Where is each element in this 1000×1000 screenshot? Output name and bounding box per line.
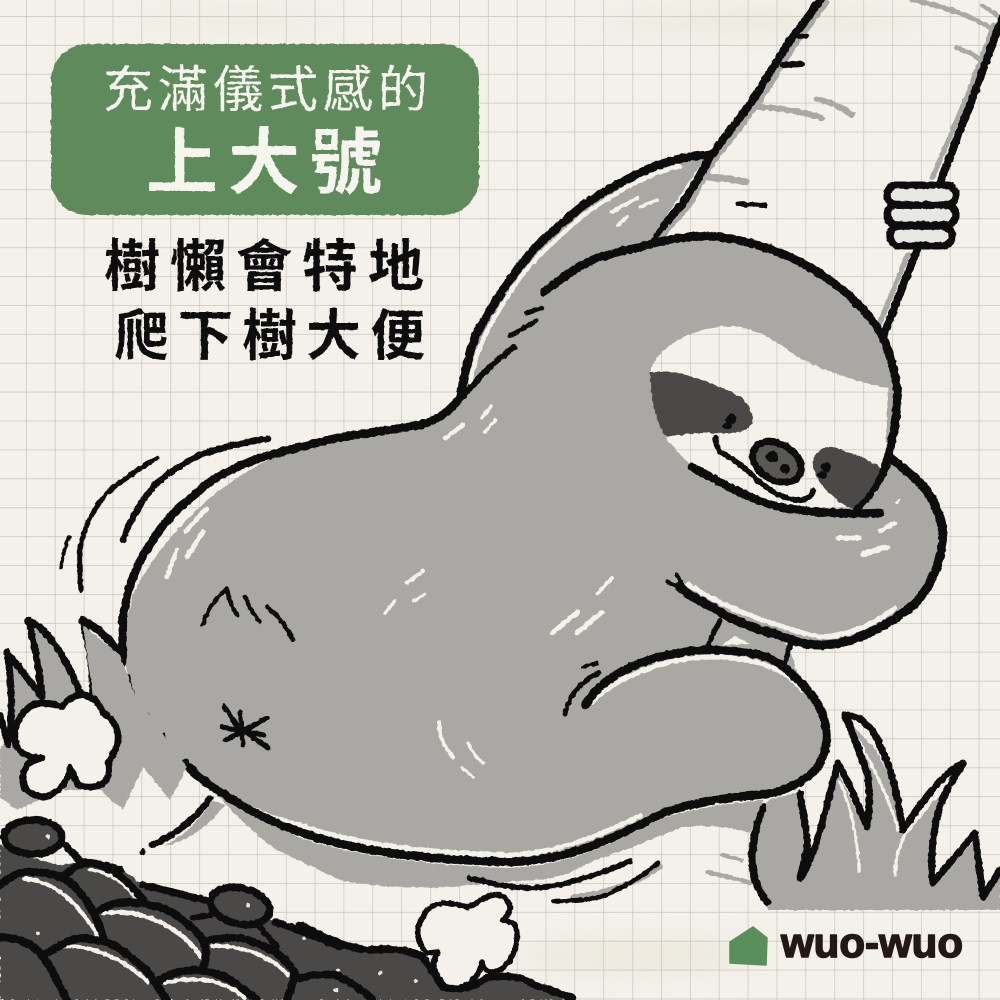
badge background	[51, 44, 479, 215]
eyes	[722, 414, 831, 479]
gray shadow band under body	[213, 790, 763, 888]
title line 1: 充滿儀式感的	[103, 62, 433, 118]
logo	[730, 919, 963, 966]
paper strips	[120, 166, 895, 855]
asterisk mark	[222, 706, 268, 748]
body tail tip	[83, 620, 122, 697]
icon: green house	[730, 927, 767, 965]
eye patch left	[650, 372, 752, 438]
rock specks	[36, 834, 418, 992]
nose	[745, 433, 809, 491]
sloth leg line	[152, 798, 225, 846]
title line 2: 上大號	[146, 124, 392, 204]
eye patch right	[812, 447, 880, 508]
grass right	[752, 715, 1000, 910]
subtitle text	[104, 235, 434, 367]
sloth face	[650, 372, 880, 508]
rocks pile	[0, 820, 573, 1000]
tree trunk	[648, 0, 1000, 337]
paper stains	[130, 10, 930, 973]
body outline	[122, 155, 943, 862]
fur highlights	[167, 198, 899, 777]
dust puff left	[0, 620, 187, 810]
subtitle line 1: 樹懶會特地	[104, 235, 434, 298]
butt fold marks	[203, 589, 293, 640]
title badge	[51, 44, 479, 215]
sloth body	[83, 155, 943, 888]
motion lines	[61, 439, 750, 901]
bark marks	[708, 0, 1000, 205]
sloth hand	[887, 185, 956, 246]
dust puff bottom	[418, 895, 517, 988]
trunk between arms	[707, 622, 790, 664]
brand wordmark: wuo-wuo	[780, 919, 963, 966]
rock highlights	[25, 846, 288, 998]
subtitle line 2: 爬下樹大便	[114, 305, 434, 367]
rock outlines	[0, 820, 573, 1000]
smile	[715, 438, 813, 500]
